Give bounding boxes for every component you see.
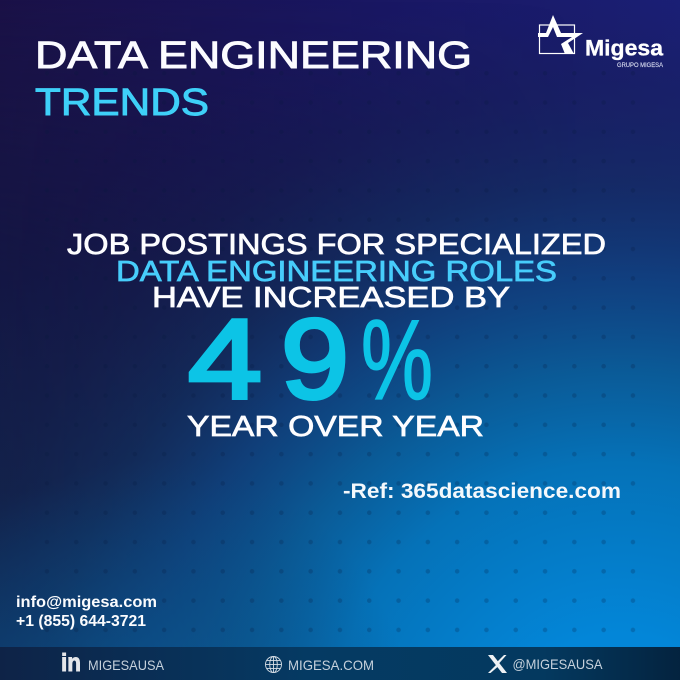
icon: x logo — [488, 655, 507, 673]
title: DATA ENGINEERING — [35, 35, 472, 77]
headline line 2: DATA ENGINEERING ROLES — [116, 256, 557, 288]
title: TRENDS — [35, 82, 209, 124]
linkedin handle — [61, 649, 165, 677]
contact info — [16, 594, 157, 630]
contact info: +1 (855) 644-3721 — [16, 613, 146, 630]
icon: linkedin: in — [61, 649, 81, 677]
big stat: 49%: % — [361, 297, 433, 423]
headline line 1: JOB POSTINGS FOR SPECIALIZED — [67, 229, 606, 261]
big stat: 49%: 4 — [188, 296, 262, 422]
logo tagline: GRUPO MIGESA — [617, 63, 663, 69]
big stat: 49%: 9 — [281, 296, 349, 422]
big stat: 49% — [188, 296, 433, 423]
website — [266, 656, 374, 673]
linkedin handle: MIGESAUSA — [88, 658, 165, 673]
source reference: -Ref: 365datascience.com — [343, 480, 621, 503]
icon: globe — [266, 656, 282, 672]
logo wordmark: Migesa — [585, 36, 664, 60]
dot grid pattern — [32, 59, 648, 645]
logo: Migesa — [538, 15, 664, 69]
website: MIGESA.COM — [288, 658, 374, 673]
headline statement — [67, 229, 606, 314]
x handle: @MIGESAUSA — [512, 657, 603, 672]
subheading: year over year: YEAR OVER YEAR — [187, 411, 484, 443]
x handle — [488, 655, 603, 673]
headline line 3: HAVE INCREASED BY — [152, 282, 510, 314]
icon: star in square — [538, 15, 583, 54]
title — [35, 35, 472, 124]
contact info: info@migesa.com — [16, 594, 157, 611]
footer bar — [0, 647, 680, 680]
